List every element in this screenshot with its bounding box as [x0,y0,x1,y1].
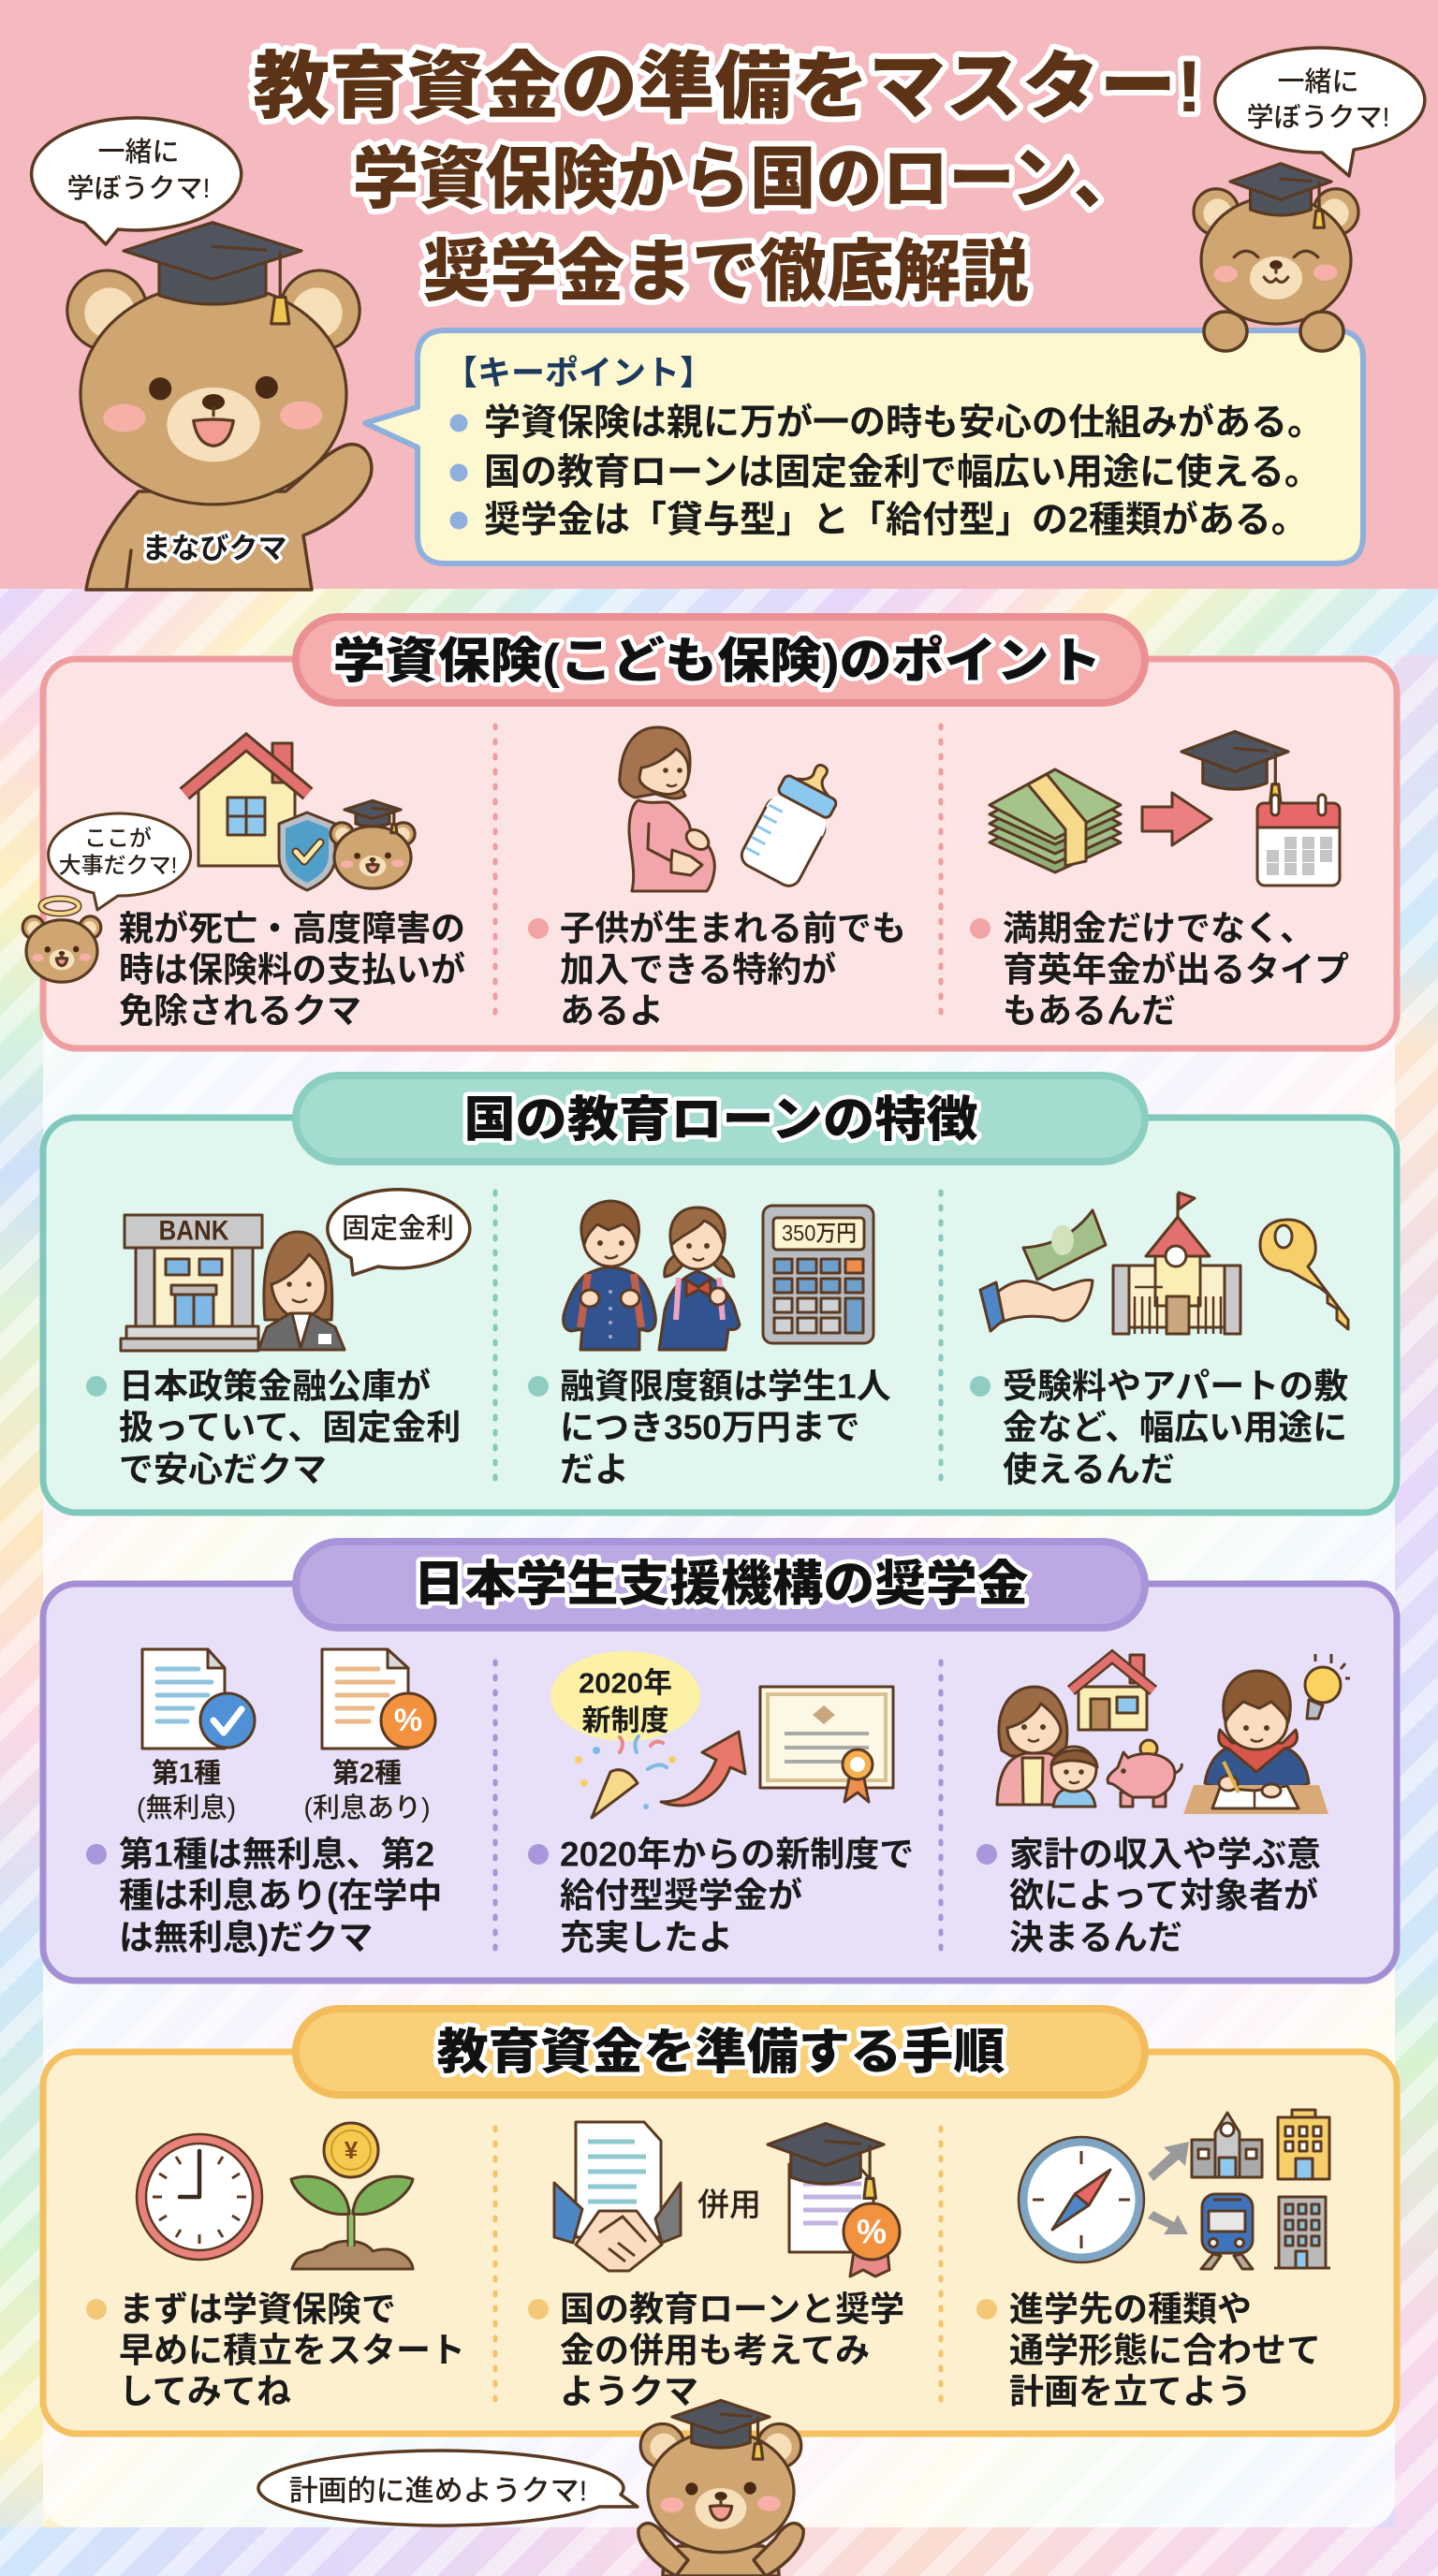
speech bubble: right: 学ぼうクマ! [1246,102,1390,133]
text: column 2: 給付型奨学金が [560,1876,802,1915]
icon: document, cap and badge: % [857,2213,887,2250]
speech bubble: bottom [258,2451,638,2525]
text: column 1: 時は保険料の支払いが [119,951,465,988]
speech bubble: right [1215,48,1425,176]
speech bubble: fixed rate [328,1190,470,1275]
icon: girl student [659,1208,740,1350]
badge: 2020 new system [550,1651,700,1741]
icon: apartment [1278,2110,1329,2179]
text: column 1: 免除されるクマ [119,992,361,1030]
text: column 3: 計画を立てよう [1009,2372,1252,2411]
heading: 教育資金を準備する手順 [436,2026,1005,2080]
text: column 1: 早めに積立をスタート [119,2331,465,2370]
icon: office building [1274,2197,1330,2268]
icon: bank clerk [258,1232,345,1350]
icon: school building [1192,2113,1262,2177]
heading [296,1076,1145,1162]
icon: calculator [763,1206,873,1343]
icon: party popper [575,1736,676,1818]
heading [296,2009,1145,2095]
icon: calendar [1257,795,1340,886]
character: peeking bear [1194,164,1358,351]
speech bubble: bottom: 計画的に進めようクマ! [289,2475,587,2507]
icon: sprout with coin [291,2123,413,2269]
heading: 学資保険(こども保険)のポイント [333,635,1101,689]
icon: type 1 document [142,1649,255,1749]
icon: graduation cap [1181,732,1288,803]
header band [0,0,1438,589]
text: column 2 [528,1367,891,1488]
speech bubble: important [49,813,191,910]
text: column 1: 第1種は無利息、第2 [119,1835,434,1874]
arrows: to schools and train [1148,2142,1189,2234]
text: column 3: 決まるんだ [1009,1919,1182,1956]
speech bubble: important: 大事だクマ! [59,854,177,878]
text: column 2 [528,910,906,1030]
text: column 1 [86,1835,442,1956]
text: column 3: 受験料やアパートの敷 [1003,1367,1348,1406]
text: column 3: もあるんだ [1003,992,1176,1030]
panel frame [43,2052,1397,2434]
arrow: rising [661,1732,745,1806]
icon: house small [1071,1655,1153,1730]
icon: bank: BANK [159,1215,229,1247]
title: 教育資金の準備をマスター! [253,45,1202,127]
arrow [1142,793,1211,845]
text: column 3: 欲によって対象者が [1009,1876,1318,1915]
text: column 1: は無利息)だクマ [119,1919,373,1956]
key points box [365,330,1363,564]
character: angel bear [22,899,101,982]
label: bear name: まなびクマ [142,532,286,565]
heading [296,617,1145,703]
text: column 2: 2020年からの新制度で [560,1835,914,1874]
panel frame [43,1584,1397,1981]
text: column 3 [970,1367,1348,1488]
label: combined use: 併用 [697,2188,761,2223]
text: column 3: 進学先の種類や [1009,2290,1252,2329]
labels: type 1 and type 2: 第1種 [152,1758,221,1789]
icon: mother and child [997,1687,1097,1807]
icon: school [1113,1193,1240,1334]
character: bottom bear [638,2400,803,2576]
text: column 2 [528,1835,914,1956]
icon: piggy bank [1108,1740,1181,1807]
text: column 2: 子供が生まれる前でも [560,910,906,947]
text: column 3 [976,2290,1321,2411]
text: column 1 [86,2290,465,2411]
text: column 2: 金の併用も考えてみ [560,2331,870,2370]
speech bubble: right: 一緒に [1277,66,1359,97]
icon: compass [1019,2137,1144,2262]
text: column 2: あるよ [560,992,664,1030]
text: column 1: 種は利息あり(在学中 [119,1876,442,1915]
heading [296,1542,1145,1628]
icon: document and handshake [554,2122,681,2271]
badge: 2020 new system: 2020年 [579,1666,672,1700]
section 4: steps [43,2009,1397,2434]
labels: type 1 and type 2: (利息あり) [303,1793,431,1823]
text: column 3: 使えるんだ [1003,1451,1175,1488]
icon: pregnant woman [620,727,714,891]
text: column 1: 扱っていて、固定金利 [119,1408,461,1447]
heading: 日本学生支援機構の奨学金 [414,1558,1028,1612]
title [253,45,1202,310]
text: column 2: ようクマ [560,2372,698,2411]
center pale panel [43,655,1395,2527]
labels: type 1 and type 2 [137,1758,431,1823]
icon: light bulb [1305,1654,1350,1719]
text: column 2 [528,2290,904,2411]
section 2: national education loan [43,1076,1397,1513]
panel frame [43,659,1397,1048]
icon: type 2 document: % [394,1703,422,1738]
icon: certificate [760,1687,893,1802]
icon: hand with bill [980,1210,1106,1331]
text: column 2: 融資限度額は学生1人 [560,1367,891,1406]
speech bubble: important: ここが [84,826,152,852]
section 3: JASSO scholarship [43,1542,1397,1981]
text: column 2: 加入できる特約が [560,951,836,988]
icon: baby bottle [738,751,852,890]
key point 3: 奨学金は「貸与型」と「給付型」の2種類がある。 [484,500,1308,541]
panel frame [43,1118,1397,1513]
text: column 1 [119,910,465,1030]
text: column 3: 家計の収入や学ぶ意 [1009,1835,1321,1874]
title: 学資保険から国のローン、 [352,142,1140,217]
text: column 2: 充実したよ [560,1919,733,1956]
text: column 2: 国の教育ローンと奨学 [560,2290,904,2329]
character: big bear [67,223,372,590]
text: column 3 [970,910,1349,1030]
labels: type 1 and type 2: 第2種 [332,1758,402,1789]
text: column 3: 育英年金が出るタイプ [1003,951,1349,988]
icon: sprout with coin: ¥ [345,2136,359,2164]
icon: document, cap and badge [768,2124,900,2276]
icon: house, shield, bear [184,742,415,890]
text: column 2: だよ [560,1451,629,1488]
badge: 2020 new system: 新制度 [582,1704,668,1737]
icon: calculator: 350万円 [782,1221,857,1247]
section 1: education insurance [22,617,1397,1048]
text: column 1: 親が死亡・高度障害の [119,910,465,947]
text: column 3: 金など、幅広い用途に [1003,1408,1347,1447]
text: column 1: してみてね [119,2372,291,2411]
key point 1: 学資保険は親に万が一の時も安心の仕組みがある。 [484,402,1324,444]
text: column 3: 通学形態に合わせて [1009,2331,1321,2370]
key point 2: 国の教育ローンは固定金利で幅広い用途に使える。 [484,453,1321,492]
key points heading: 【キーポイント】 [444,354,713,391]
title: 奨学金まで徹底解説 [423,235,1028,310]
labels: type 1 and type 2: (無利息) [137,1793,236,1823]
heading: 国の教育ローンの特徴 [464,1093,977,1148]
text: column 1: まずは学資保険で [119,2290,396,2329]
icon: type 2 document [322,1649,435,1749]
icon: train [1201,2194,1253,2269]
icon: key [1260,1220,1348,1329]
speech bubble: left [32,118,242,244]
text: column 1 [86,1367,461,1488]
text: column 3 [976,1835,1321,1956]
speech bubble: left: 一緒に [97,137,180,168]
text: column 1: 日本政策金融公庫が [119,1367,431,1406]
text: column 3: 満期金だけでなく、 [1003,910,1314,947]
speech bubble: left: 学ぼうクマ! [66,173,211,204]
icon: clock [137,2134,262,2260]
icon: bank [121,1215,262,1351]
icon: boy student [564,1201,655,1350]
text: column 2: につき350万円まで [560,1408,860,1447]
icon: money stack [990,769,1121,872]
speech bubble: fixed rate: 固定金利 [342,1213,454,1245]
striped rainbow background [0,580,1438,2576]
icon: boy studying [1183,1671,1328,1814]
text: column 1: で安心だクマ [119,1451,327,1488]
